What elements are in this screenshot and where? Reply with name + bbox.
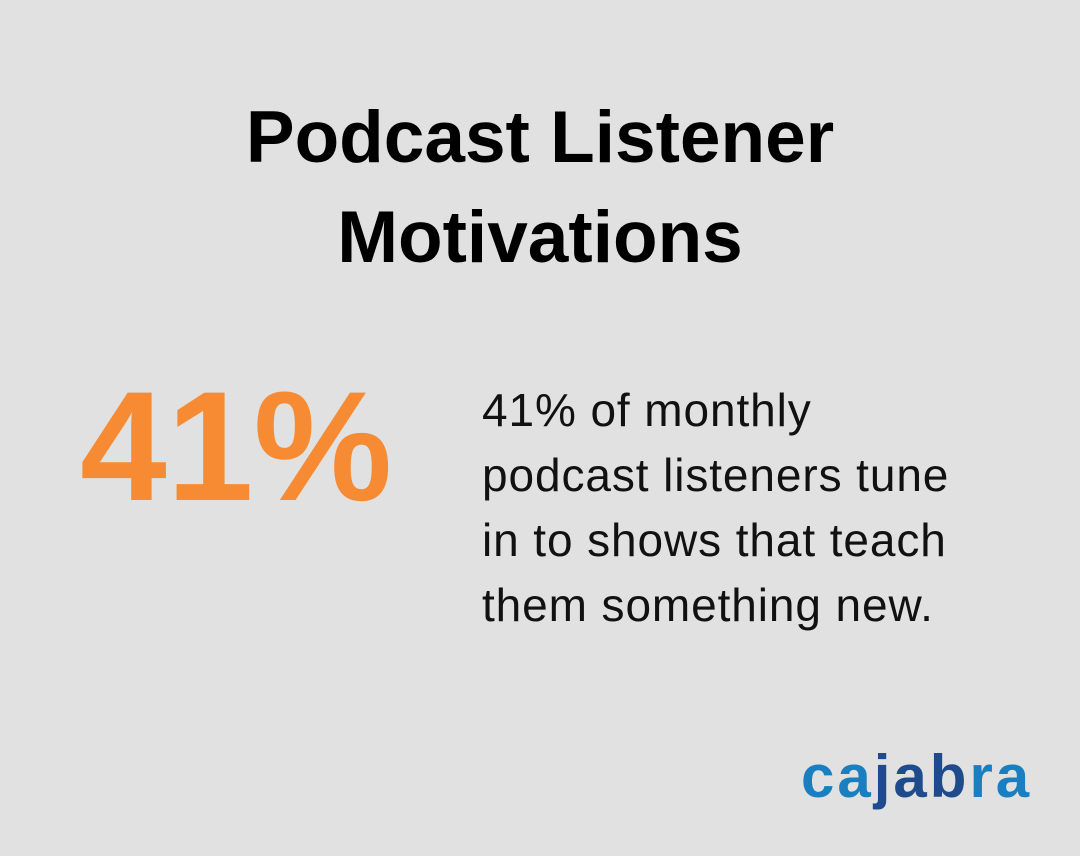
- logo: cajabra: [801, 743, 1032, 810]
- description text: podcast listeners tune: [482, 449, 949, 501]
- title: Podcast Listener: [246, 97, 834, 178]
- description text: in to shows that teach: [482, 514, 947, 566]
- big stat: 41%: [80, 360, 392, 534]
- title: [246, 97, 834, 278]
- description text: 41% of monthly: [482, 384, 812, 436]
- description text: them something new.: [482, 579, 934, 631]
- description text: [482, 384, 949, 631]
- title: Motivations: [337, 197, 743, 278]
